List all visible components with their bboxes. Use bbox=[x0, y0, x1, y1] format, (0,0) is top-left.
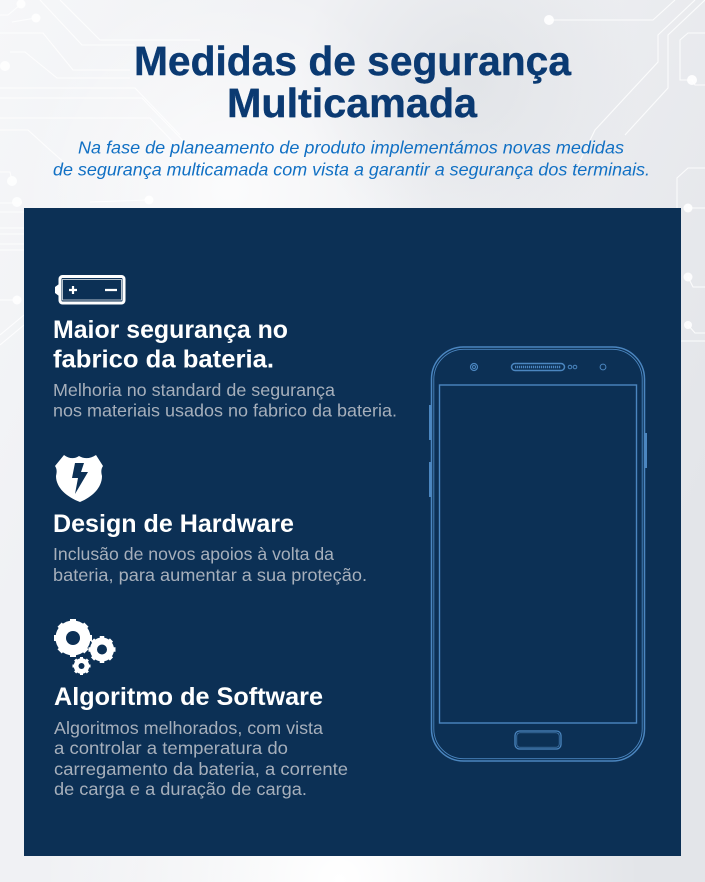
section: battery heading bbox=[53, 316, 288, 374]
section: software text: de carga e a duração de carga. bbox=[54, 779, 307, 799]
section: battery text: Melhoria no standard de segurança bbox=[53, 380, 335, 400]
phone speaker bbox=[512, 364, 564, 370]
section: hardware text bbox=[53, 544, 367, 585]
section: hardware text: Inclusão de novos apoios à volta da bbox=[53, 544, 334, 564]
subtitle: Na fase de planeamento de produto implementámos novas medidas bbox=[78, 138, 624, 158]
section: battery heading: fabrico da bateria. bbox=[53, 346, 274, 374]
section: battery heading: Maior segurança no bbox=[53, 316, 288, 344]
section: battery text bbox=[53, 380, 397, 420]
title bbox=[134, 38, 572, 126]
title: Multicamada bbox=[227, 80, 478, 126]
phone side buttons bbox=[430, 405, 646, 497]
section: hardware heading: Design de Hardware bbox=[53, 510, 294, 538]
section: software text: Algoritmos melhorados, com vista bbox=[54, 718, 323, 738]
phone camera bbox=[470, 364, 478, 370]
subtitle: de segurança multicamada com vista a garantir a segurança dos terminais. bbox=[53, 160, 650, 180]
section: software heading: Algoritmo de Software bbox=[54, 683, 323, 711]
section: battery text: nos materiais usados no fabrico da bateria. bbox=[53, 400, 397, 420]
section: software text: a controlar a temperatura do bbox=[54, 738, 288, 758]
gear large bbox=[54, 619, 92, 657]
section: software text: carregamento da bateria, a corrente bbox=[54, 759, 348, 779]
icon: battery bbox=[55, 276, 124, 303]
panel: main bbox=[24, 208, 681, 856]
phone illustration bbox=[430, 347, 646, 761]
phone home button bbox=[515, 731, 561, 749]
phone body bbox=[432, 347, 644, 761]
title: Medidas de segurança bbox=[134, 38, 572, 84]
phone sensors bbox=[568, 364, 606, 370]
phone screen bbox=[440, 385, 636, 723]
icon: gears bbox=[54, 619, 116, 675]
gear medium bbox=[88, 636, 116, 663]
subtitle bbox=[53, 138, 650, 180]
icon: shield bbox=[55, 455, 103, 502]
section: software text bbox=[54, 718, 348, 799]
section: hardware text: bateria, para aumentar a sua proteção. bbox=[53, 565, 367, 585]
gear small bbox=[72, 657, 90, 675]
